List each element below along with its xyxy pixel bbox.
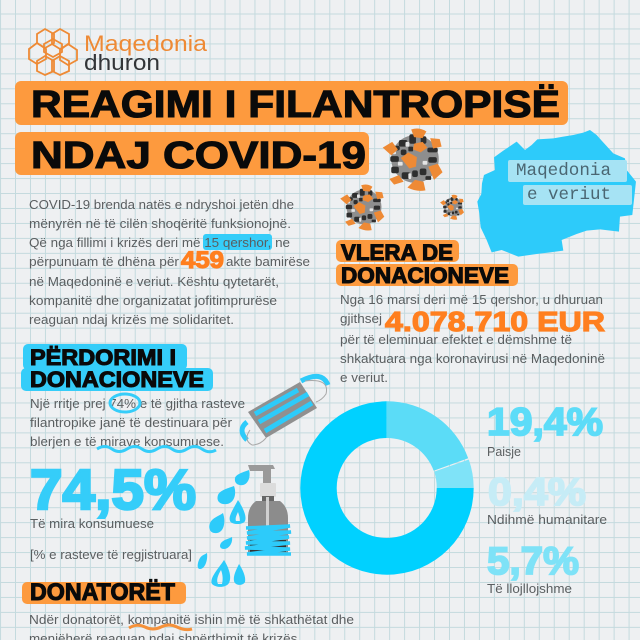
title: NDAJ COVID-19: [31, 135, 366, 177]
stat: 74,5%: [% e rasteve të regjistruara]: [30, 548, 192, 562]
intro text block: Që nga fillimi i krizës deri më 15 qershor, ne: [29, 236, 290, 250]
title: REAGIMI I FILANTROPISË: [31, 83, 560, 126]
heading: Përdorimi i donacioneve: [21, 344, 213, 392]
stat: 5,7%: 5,7%: [487, 540, 579, 583]
heading: Përdorimi i donacioneve: PËRDORIMI I: [30, 345, 176, 370]
donors text block: Ndër donatorët, kompanitë ishin më të shkathëtat dhe: [29, 613, 354, 627]
icon: medium coronavirus: [340, 185, 384, 230]
map label: Maqedonia: [516, 161, 611, 181]
stat: 74,5%: Të mira konsumuese: [30, 517, 154, 531]
stat: 0,4%: 0,4%: [488, 471, 586, 514]
intro text block: reaguan ndaj krizës me solidaritet.: [29, 313, 234, 327]
donations use text block: filantropike janë të destinuara për: [30, 416, 232, 430]
intro text block: kompanitë dhe organizatat jofitimprurëse: [29, 294, 277, 308]
intro text block: përpunuam të dhëna për: [29, 255, 179, 269]
donations use text block: Një rritje prej 74% e të gjitha rasteve: [30, 397, 245, 411]
stat: 19,4%: Paisje: [487, 445, 521, 459]
intro text block: COVID-19 brenda natës e ndryshoi jetën dhe: [29, 198, 294, 212]
intro text block: mënyrën në të cilën shoqëritë funksionojnë.: [29, 217, 291, 231]
logo word: Maqedonia: Maqedonia: [84, 31, 208, 56]
wave underline: [129, 625, 192, 630]
donut main slice: [300, 401, 474, 575]
donations use text block: blerjen e të mirave konsumuese.: [30, 435, 224, 449]
intro text block: në Maqedoninë e veriut. Kështu qytetarët,: [29, 275, 279, 289]
map label: [508, 160, 632, 205]
heading: Vlera de donacioneve: DONACIONEVE: [341, 263, 509, 288]
map: North Macedonia: [477, 130, 636, 257]
icon: hexagon knot: [29, 29, 77, 75]
icon: sanitizer drops: [198, 470, 250, 587]
donations value text block: [340, 293, 605, 385]
icon: small coronavirus: [440, 195, 464, 220]
stat: 0,4%: Ndihmë humanitare: [487, 513, 607, 527]
intro text block: akte bamirëse: [226, 255, 310, 269]
logo: Maqedonia dhuron: [29, 29, 208, 75]
heading: Vlera de donacioneve: [336, 240, 518, 288]
intro text block: [29, 198, 310, 327]
wave underline: [97, 446, 216, 452]
chart: donut: [300, 401, 474, 575]
stat: 19,4%: 19,4%: [487, 401, 603, 444]
title: [15, 81, 568, 177]
donations value text block: gjithsej: [340, 312, 382, 326]
stat: 74,5%: [30, 458, 196, 562]
donations value text block: shkaktuara nga koronavirusi në Maqedoninë: [340, 352, 605, 366]
stat: 0,4%: [487, 471, 607, 527]
donations value text block: Nga 16 marsi deri më 15 qershor, u dhuruan: [340, 293, 603, 307]
scribble circle around 74%: [110, 394, 140, 412]
intro text block: 459: [181, 247, 224, 274]
donors text block: [29, 613, 354, 640]
donations value text block: e veriut.: [340, 371, 388, 385]
donations use text block: [30, 394, 245, 452]
icon: large coronavirus: [383, 128, 443, 191]
icon: sanitizer bottle: [245, 465, 291, 554]
donations value text block: 4.078.710 EUR: [385, 306, 605, 337]
donut slice: equipment: [387, 401, 468, 471]
icon: face mask: [242, 376, 328, 445]
scribble on bottle: [245, 526, 291, 554]
stat: 74,5%: 74,5%: [30, 458, 196, 522]
logo word: dhuron: dhuron: [84, 50, 160, 75]
donut slice: other: [434, 460, 474, 488]
stat: 5,7%: Të llojllojshme: [487, 582, 572, 596]
map label: e veriut: [527, 185, 611, 205]
heading: Përdorimi i donacioneve: DONACIONEVE: [30, 367, 204, 392]
donations value text block: për të eleminuar efektet e dëmshme të: [340, 333, 572, 347]
heading: Donatorët: DONATORËT: [30, 579, 175, 606]
heading: Vlera de donacioneve: VLERA DE: [341, 240, 453, 265]
